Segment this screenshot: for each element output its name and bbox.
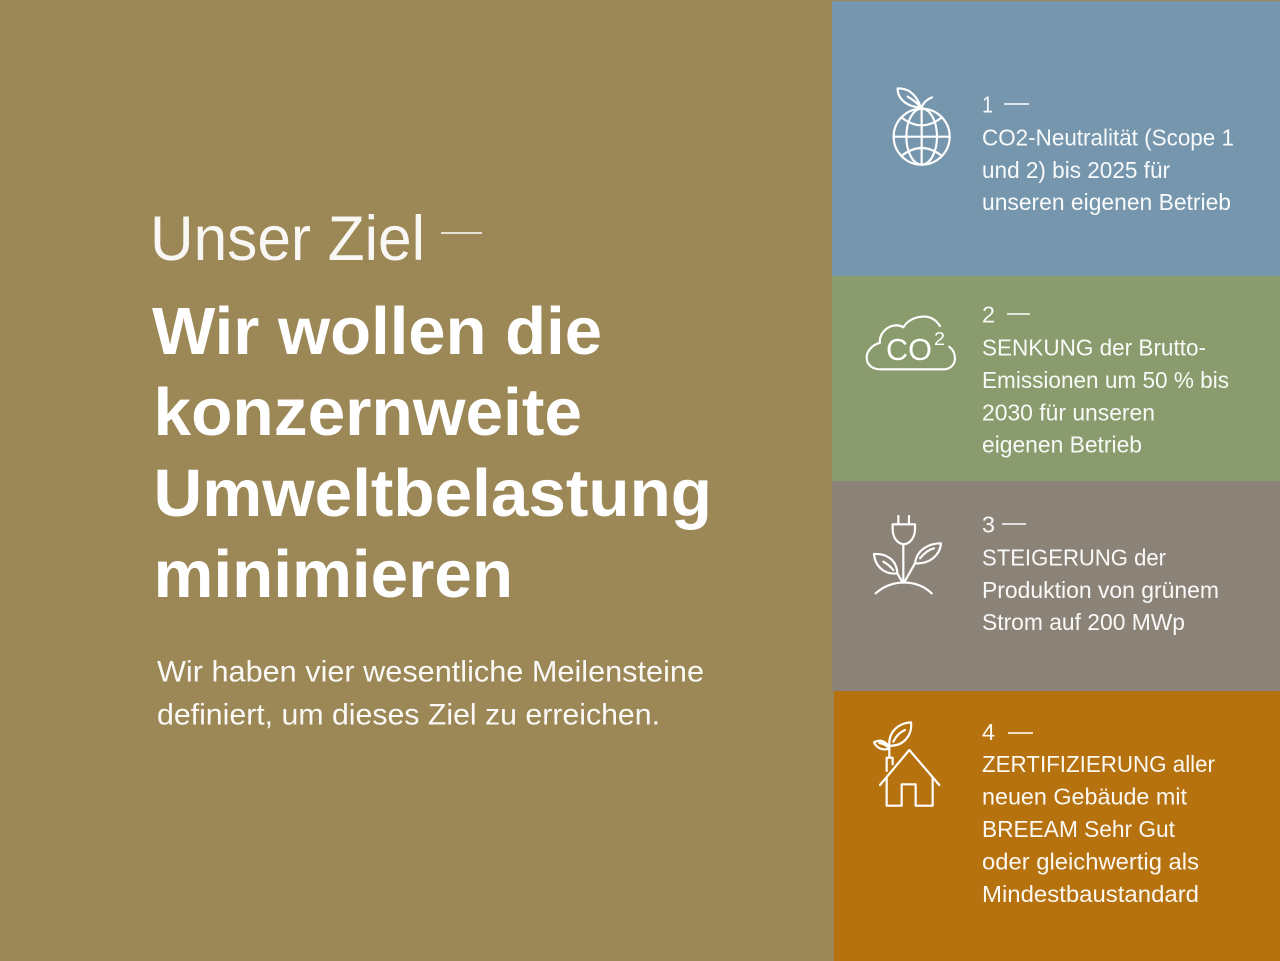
milestone 3 text: Produktion von grünem — [982, 577, 1219, 603]
main heading — [152, 294, 712, 612]
panel: milestone 2 — [832, 276, 1280, 481]
milestone 4 text: ZERTIFIZIERUNG aller — [982, 751, 1215, 777]
milestone 4 text: Mindestbaustandard — [982, 881, 1199, 907]
icon: globe with leaf — [894, 88, 950, 165]
milestone 1 text: CO2-Neutralität (Scope 1 — [982, 124, 1234, 150]
panel: milestone 1 — [832, 1, 1280, 276]
milestone 1 text: 1 — [982, 92, 993, 118]
intro text: definiert, um dieses Ziel zu erreichen. — [157, 698, 660, 732]
main heading: konzernweite — [154, 375, 582, 450]
milestone 4 text — [982, 719, 1215, 907]
main heading: Wir wollen die — [152, 294, 602, 369]
milestone 2 text — [982, 302, 1229, 458]
eyebrow heading: Unser Ziel: Unser Ziel — [150, 204, 425, 274]
icon: plug plant — [874, 516, 941, 593]
icon: CO2 cloud: CO — [886, 332, 932, 367]
icon: CO2 cloud — [867, 317, 955, 369]
intro text: Wir haben vier wesentliche Meilensteine — [157, 656, 704, 688]
milestone 1 text — [982, 92, 1234, 215]
panel: milestone 4 — [834, 691, 1280, 961]
milestone 2 text: eigenen Betrieb — [982, 432, 1142, 458]
milestone 2 text: Emissionen um 50 % bis — [982, 367, 1229, 393]
milestone 2 text: SENKUNG der Brutto- — [982, 334, 1206, 360]
main heading: Umweltbelastung — [154, 456, 712, 531]
intro text — [157, 656, 704, 732]
milestone 2 text: 2030 für unseren — [982, 400, 1155, 426]
milestone 4 text: oder gleichwertig als — [982, 848, 1199, 874]
icon: house with leaves — [874, 722, 939, 806]
panel: milestone 3 — [832, 481, 1280, 691]
milestone 3 text — [982, 512, 1219, 635]
milestone 4 text: BREEAM Sehr Gut — [982, 816, 1175, 842]
milestone 4 text: 4 — [982, 719, 995, 745]
milestone 1 text: und 2) bis 2025 für — [982, 157, 1170, 183]
milestone 3 text: 3 — [982, 512, 995, 538]
milestone 4 text: neuen Gebäude mit — [982, 784, 1187, 810]
icon: CO2 cloud: 2 — [934, 329, 945, 349]
milestone 3 text: STEIGERUNG der — [982, 544, 1166, 570]
main heading: minimieren — [154, 537, 513, 612]
milestone 1 text: unseren eigenen Betrieb — [982, 189, 1231, 215]
milestone 2 text: 2 — [982, 302, 995, 328]
milestone 3 text: Strom auf 200 MWp — [982, 609, 1185, 635]
